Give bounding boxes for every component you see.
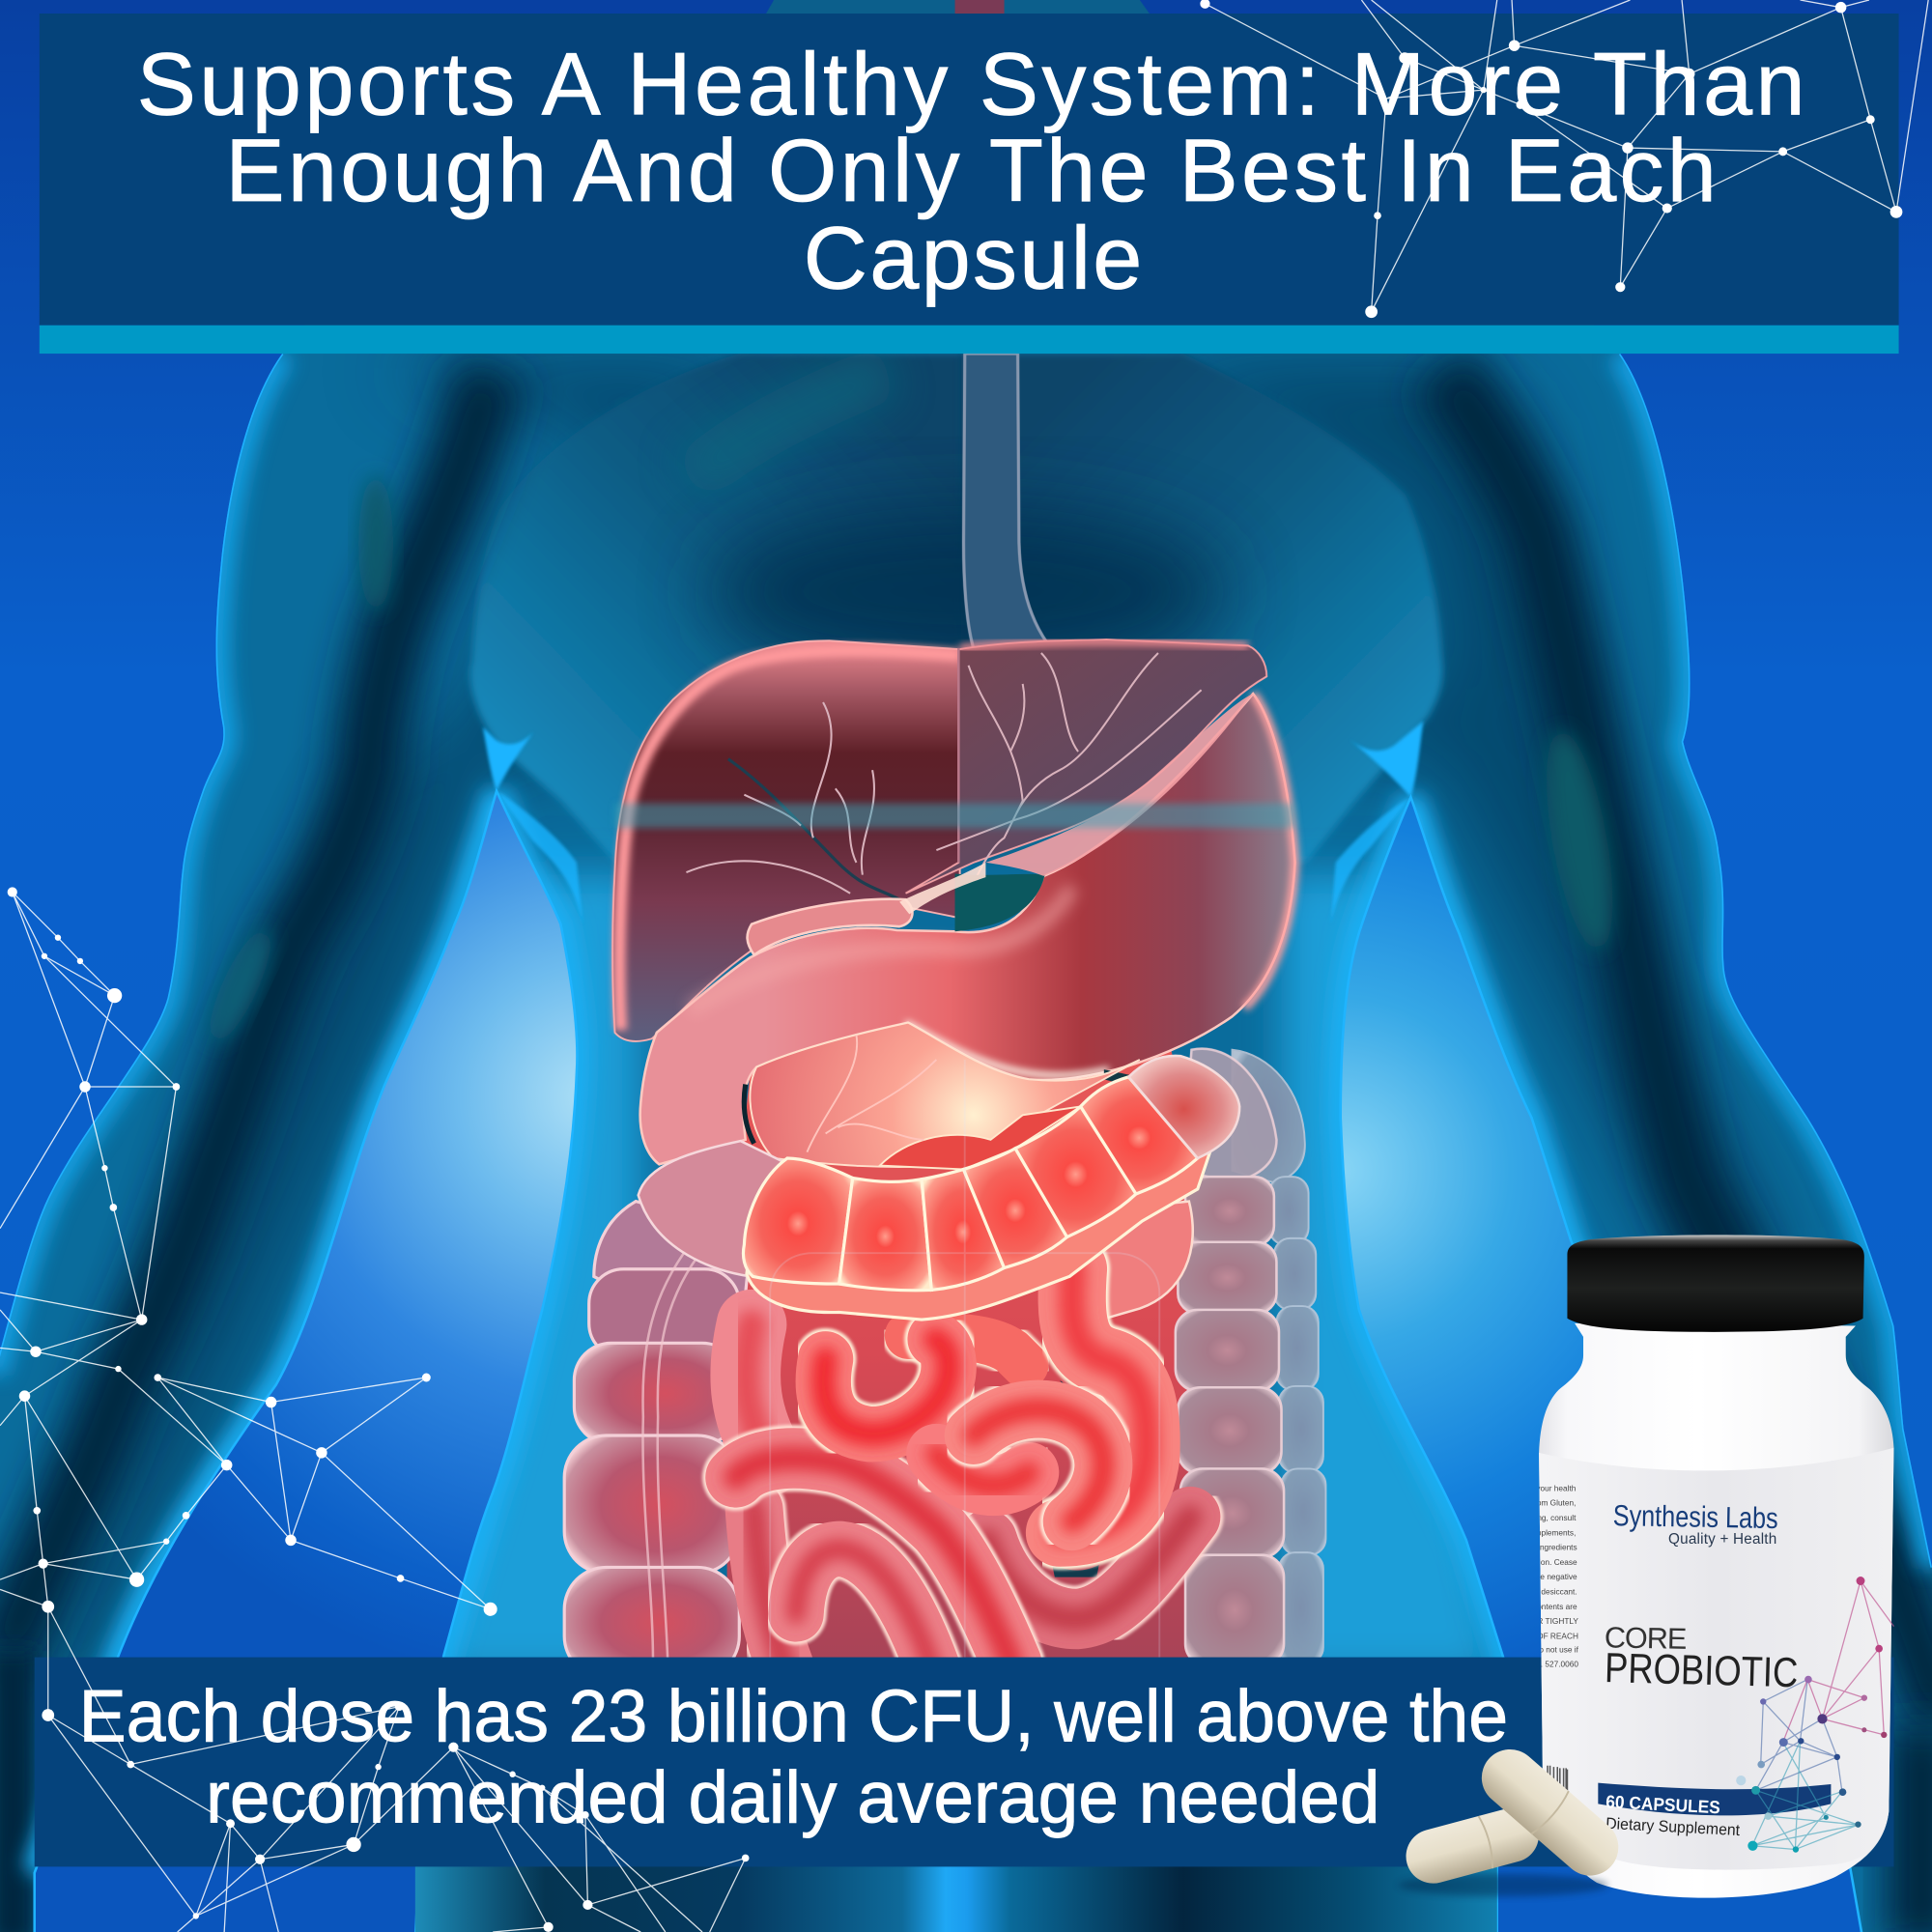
bile vessels [686,653,1202,918]
side panel text: d. 527.0060 [1536,1660,1578,1669]
side panel text: or nursing, consult [1511,1513,1577,1522]
side panel text: d. all contents are [1514,1602,1577,1611]
central glow region [750,1023,1140,1167]
gap between left arm and torso [35,791,577,1932]
title [137,36,1805,307]
legs below the banner [415,1861,1497,1932]
side panel text: y have negative [1521,1572,1577,1581]
brand name: Synthesis Labs [1613,1499,1778,1535]
dark gaps between loops [956,1380,1099,1577]
title: Capsule [804,209,1142,307]
side panel text: ntains a desiccant. [1511,1587,1577,1597]
side panel text: dition. Do not use if [1510,1644,1579,1654]
product name: PROBIOTIC [1604,1645,1799,1696]
armpit highlights [483,721,1423,924]
side panel text [1540,1486,1578,1667]
capsules [1399,1738,1630,1896]
tagline: Quality + Health [1668,1531,1776,1548]
product line: CORE [1605,1621,1688,1656]
translucent peritoneum outline [770,1060,1159,1658]
transverse colon [639,1056,1239,1320]
abdominal backdrop [727,1047,1202,1663]
label area [1539,1448,1893,1870]
liver [612,639,1266,1041]
side panel text: ted by your health [1513,1483,1577,1492]
capsule count strip [1598,1783,1831,1815]
ascending colon [564,1202,752,1678]
bottle body [1539,1323,1893,1898]
side panel text: rmed from Gluten, [1512,1498,1576,1508]
side panel text: OUT OF REACH [1519,1631,1578,1640]
lower capsule [1400,1802,1545,1889]
small intestine loops [735,1269,1190,1676]
label molecular network [1736,1577,1893,1853]
side panel text: ietary supplements, [1507,1527,1576,1537]
barcode [1548,1766,1567,1792]
teal strip [40,326,1899,354]
top banner [40,14,1899,354]
side panel text: to the ingredients [1516,1543,1577,1552]
callout: dose text [79,1675,1508,1838]
upper capsule [1470,1738,1630,1888]
gap between right arm and torso [1341,797,1863,1932]
esophagus [955,0,1005,17]
network: lower left [0,887,750,1932]
product bottle [1507,1235,1893,1898]
side panel text: TAINER TIGHTLY [1515,1616,1578,1626]
callout: dose text: recommended daily average needed [206,1756,1380,1838]
organs illustration [564,0,1325,1678]
right liver lobe [906,639,1266,894]
pink tube by descending colon [1072,1202,1193,1324]
fine vessels [807,1035,936,1152]
dietary supplement: Dietary Supplement [1605,1814,1741,1839]
neck above the banner [764,0,1152,17]
cyan light band [614,804,1295,828]
bottom banner [35,1658,1893,1866]
title: Supports A Healthy System: More Than [137,36,1805,134]
descending colon [1176,1049,1325,1665]
callout: dose text: Each dose has 23 billion CFU, well above the [79,1675,1508,1757]
stomach and duodenum [640,694,1295,1164]
title: Enough And Only The Best In Each [225,122,1717,220]
cap [1567,1235,1864,1332]
capsule shadow [1399,1874,1608,1896]
network: top right [1200,0,1928,318]
capsule count: 60 CAPSULES [1605,1791,1720,1817]
side panel text: digestion. Cease [1518,1557,1577,1567]
red tube above colon [880,1106,1081,1169]
